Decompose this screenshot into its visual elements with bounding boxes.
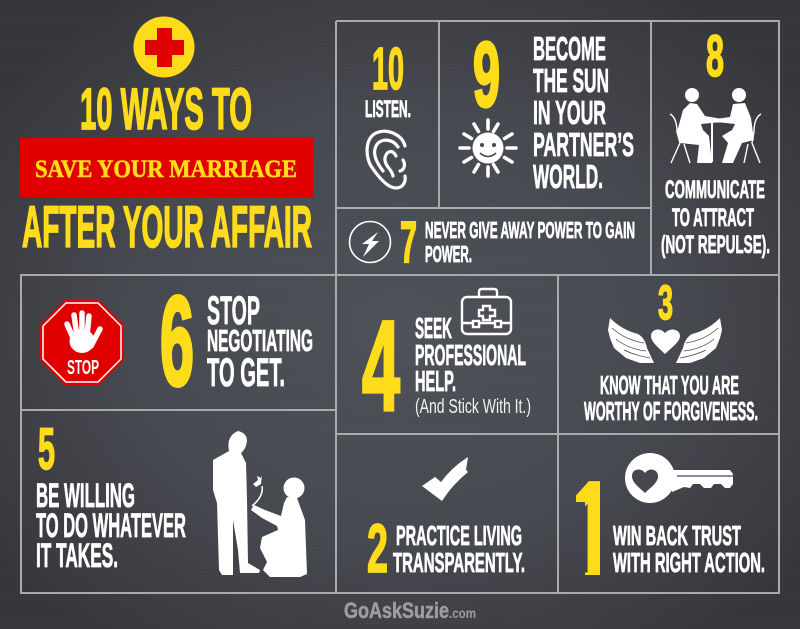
icon: kneeling man offering flower (213, 431, 307, 577)
text: be willing (36, 477, 186, 575)
text: practice living transparently (393, 520, 525, 578)
text: practice living transparently: PRACTICE LIVING (396, 520, 522, 551)
panel: 1 win back trust (576, 453, 764, 575)
icon: lightning bolt in circle (350, 222, 390, 262)
text: be willing: IT TAKES. (36, 537, 118, 575)
text: NEGOTIATING (207, 323, 313, 358)
text: LISTEN. (365, 96, 411, 123)
icon: ear (367, 131, 405, 188)
text: never give away power (425, 217, 635, 267)
text: seek professional help (415, 313, 531, 418)
icon: stop sign (40, 300, 124, 385)
panel: 4 seek professional help (362, 289, 531, 438)
panel: 2 practice living transparently (367, 457, 525, 587)
footer: website credit: .com (449, 605, 476, 621)
panel: 6 stop negotiating: 6 (160, 270, 194, 412)
text: seek professional help: HELP. (415, 366, 456, 398)
text: be willing: BE WILLING (36, 477, 135, 515)
text: AFTER YOUR AFFAIR (22, 195, 312, 260)
panel: 5 be willing: TO DO WHATEVER (36, 507, 186, 545)
text: communicate to attract (661, 176, 770, 259)
number 8: 8 (706, 24, 724, 89)
number 3: 3 (658, 277, 673, 330)
text: win back trust (613, 520, 765, 578)
text: stop negotiating to get: STOP (207, 289, 260, 333)
text: become the sun: PARTNER’S (533, 126, 634, 163)
text: seek professional help: SEEK (415, 313, 452, 345)
text: seek professional help: (And Stick With It.) (415, 396, 531, 418)
panel: 6 stop negotiating (40, 270, 313, 412)
panel: 5 be willing (36, 417, 307, 577)
banner: save your marriage (20, 138, 313, 197)
icon: medical bag (462, 289, 511, 334)
text: stop negotiating to get (207, 289, 313, 395)
icon: smiling sun (460, 120, 516, 176)
number 5: 5 (38, 417, 55, 482)
icon: winged heart (608, 318, 722, 363)
icon: heart key (625, 453, 733, 503)
number 1: 1 (568, 450, 618, 624)
text: seek professional help: PROFESSIONAL (415, 340, 526, 372)
number 9: 9 (473, 24, 500, 126)
panel: 3 worthy of forgiveness (584, 277, 758, 426)
number 4: 4 (362, 295, 400, 438)
text: become the sun: THE SUN (533, 62, 609, 99)
panel: 9 become the sun (460, 24, 634, 195)
text: become the sun: WORLD. (533, 158, 603, 195)
text: become the sun (533, 30, 634, 195)
text: practice living transparently: TRANSPARENTLY. (393, 547, 525, 578)
icon: couple at table (670, 88, 761, 163)
number 7: 7 (400, 210, 417, 275)
panel: 7 never give away power (350, 210, 635, 275)
icon: check mark (422, 457, 468, 501)
title block (20, 16, 313, 260)
text: stop negotiating to get: TO GET. (207, 351, 285, 395)
heading: 10 ways to: 10 WAYS TO (80, 77, 252, 142)
banner: save your marriage: SAVE YOUR MARRIAGE (35, 156, 297, 183)
icon: medical cross badge (134, 16, 194, 78)
text: never give away power: POWER. (425, 241, 472, 267)
panel: 8 communicate (661, 24, 770, 259)
panel: 10 listen (365, 36, 411, 188)
text: become the sun: BECOME (533, 30, 606, 67)
text: know that you are worthy (584, 370, 758, 426)
number 2: 2 (367, 510, 388, 587)
text: become the sun: IN YOUR (533, 94, 606, 131)
icon: stop sign: STOP (67, 357, 99, 379)
panel: 10 listen: 10 (372, 36, 404, 102)
footer: website credit: GoAskSuzie (344, 598, 449, 623)
